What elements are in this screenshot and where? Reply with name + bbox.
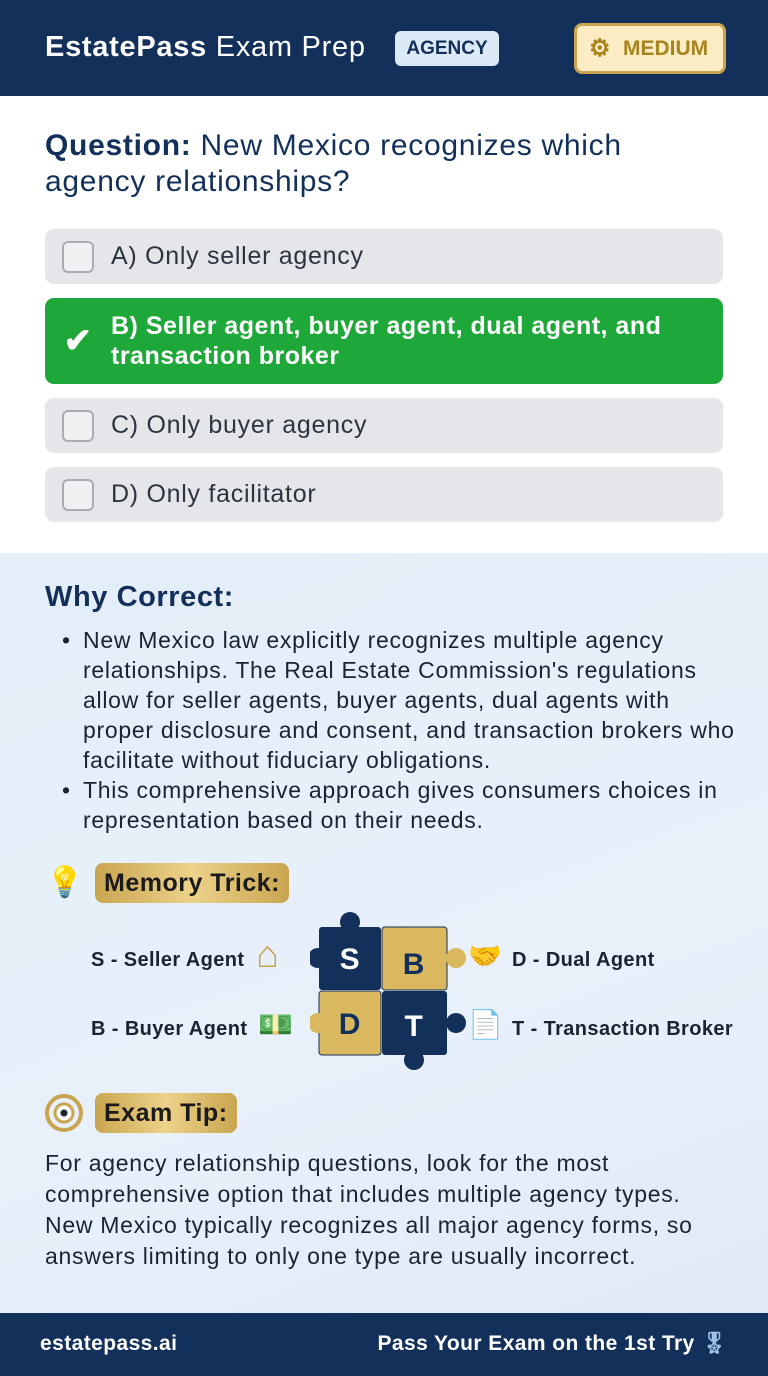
icon: document gear: 📄 xyxy=(468,1009,504,1040)
icon: handshake: 🤝 xyxy=(468,941,502,971)
option D: D) Only facilitator xyxy=(111,480,316,508)
label T: T - Transaction Broker xyxy=(512,1018,733,1040)
memory trick heading: Memory Trick: xyxy=(104,869,280,897)
difficulty badge xyxy=(574,23,726,74)
option A: A) Only seller agency xyxy=(111,242,364,270)
question: agency relationships? xyxy=(45,165,350,198)
explanation bullets: • xyxy=(62,777,71,803)
explanation bullets: relationships. The Real Estate Commission's regulations xyxy=(83,657,697,683)
footer slogan: Pass Your Exam on the 1st Try 🎖 xyxy=(377,1332,728,1355)
label D: D - Dual Agent xyxy=(512,949,655,971)
icon: house: ⌂ xyxy=(256,934,280,976)
option B correct: B) Seller agent, buyer agent, dual agent, and xyxy=(111,312,661,340)
explanation bullets: facilitate without fiduciary obligations. xyxy=(83,747,491,773)
explanation bullets: New Mexico law explicitly recognizes multiple agency xyxy=(83,627,664,653)
category badge xyxy=(395,31,499,66)
puzzle pieces: D xyxy=(339,1008,361,1041)
option B correct: ✔ xyxy=(64,322,92,360)
header bar xyxy=(0,0,768,96)
brand title: EstatePass Exam Prep xyxy=(45,31,366,63)
question: Question: New Mexico recognizes which xyxy=(45,129,622,162)
footer url: estatepass.ai xyxy=(40,1332,177,1355)
exam tip text: answers limiting to only one type are usually incorrect. xyxy=(45,1243,636,1269)
memory trick heading xyxy=(95,863,289,903)
puzzle pieces xyxy=(310,912,466,1070)
why correct heading: Why Correct: xyxy=(45,581,234,613)
footer bar xyxy=(0,1313,768,1376)
exam tip heading: Exam Tip: xyxy=(104,1099,228,1127)
option D xyxy=(45,467,723,522)
exam tip text: New Mexico typically recognizes all major agency forms, so xyxy=(45,1212,693,1238)
option A xyxy=(45,229,723,284)
exam tip heading xyxy=(95,1093,237,1133)
category badge: AGENCY xyxy=(406,38,488,59)
puzzle pieces: S xyxy=(340,943,360,976)
puzzle pieces: T xyxy=(404,1010,424,1043)
explanation bullets xyxy=(62,627,735,833)
explanation panel xyxy=(0,553,768,1313)
icon: lightbulb: 💡 xyxy=(46,866,84,899)
difficulty badge: ⚙ xyxy=(589,35,611,62)
icon: money hand: 💵 xyxy=(258,1009,294,1040)
label S: S - Seller Agent xyxy=(91,949,244,971)
option B correct xyxy=(45,298,723,384)
label B: B - Buyer Agent xyxy=(91,1018,247,1040)
option C xyxy=(45,398,723,453)
explanation bullets: This comprehensive approach gives consumers choices in xyxy=(83,777,718,803)
exam tip text: comprehensive option that includes multiple agency types. xyxy=(45,1181,681,1207)
question xyxy=(45,129,622,198)
explanation bullets: allow for seller agents, buyer agents, dual agents with xyxy=(83,687,670,713)
explanation bullets: • xyxy=(62,627,71,653)
exam tip text xyxy=(45,1150,693,1269)
explanation bullets: representation based on their needs. xyxy=(83,807,484,833)
option B correct: transaction broker xyxy=(111,342,340,370)
icon: target xyxy=(45,1094,83,1132)
puzzle pieces: B xyxy=(403,948,425,981)
exam tip text: For agency relationship questions, look for the most xyxy=(45,1150,609,1176)
option C: C) Only buyer agency xyxy=(111,411,367,439)
difficulty badge: MEDIUM xyxy=(623,37,708,60)
explanation bullets: proper disclosure and consent, and transaction brokers who xyxy=(83,717,735,743)
puzzle mnemonic xyxy=(91,912,733,1070)
